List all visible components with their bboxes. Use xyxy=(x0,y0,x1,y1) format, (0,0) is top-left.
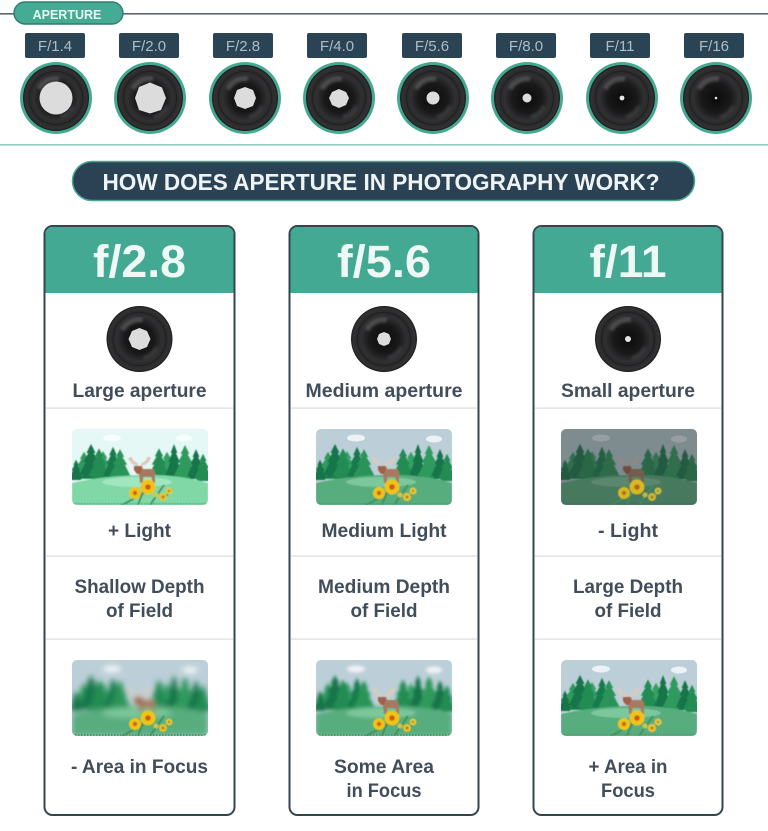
stop f/1.4 xyxy=(20,33,92,134)
label medium depth of field: Medium Depth xyxy=(318,576,450,598)
label some area in focus: in Focus xyxy=(346,780,422,802)
teal rule line xyxy=(0,144,768,146)
stop f/11: F/11 xyxy=(606,38,634,55)
stop f/2.8 xyxy=(209,33,281,134)
stop f/2.8: F/2.8 xyxy=(226,38,260,55)
label more area in focus xyxy=(588,756,668,802)
lens icon small aperture xyxy=(595,306,661,372)
stop f/5.6: F/5.6 xyxy=(415,38,449,55)
label minus light: - Light xyxy=(598,520,659,542)
aperture scale row xyxy=(20,33,752,134)
stop f/2.0: F/2.0 xyxy=(132,38,166,55)
label more area in focus: Focus xyxy=(601,780,655,802)
stop f/2.0 xyxy=(114,33,186,134)
scene blurred background xyxy=(69,660,212,736)
label small aperture: Small aperture xyxy=(561,380,695,402)
header f/11: f/11 xyxy=(590,236,666,287)
header f/5.6 xyxy=(290,227,478,293)
scene slightly blurred background xyxy=(313,660,456,736)
label some area in focus: Some Area xyxy=(334,756,434,778)
label more area in focus: + Area in xyxy=(588,756,668,778)
label shallow depth of field: of Field xyxy=(106,600,173,622)
label medium depth of field xyxy=(318,576,450,622)
stop f/8.0 xyxy=(491,33,563,134)
stop f/11 xyxy=(586,33,658,134)
label large depth of field: Large Depth xyxy=(573,576,683,598)
stop f/4.0 xyxy=(303,33,375,134)
label shallow depth of field: Shallow Depth xyxy=(74,576,204,598)
scene low light xyxy=(558,429,701,505)
lens icon medium aperture xyxy=(351,306,417,372)
label medium aperture: Medium aperture xyxy=(306,380,463,402)
label medium depth of field: of Field xyxy=(350,600,418,622)
aperture tag xyxy=(14,2,123,24)
lens icon large aperture xyxy=(106,306,172,372)
stop f/16 xyxy=(680,33,752,134)
label shallow depth of field xyxy=(74,576,204,622)
scene medium light xyxy=(313,429,456,505)
label plus light: + Light xyxy=(108,520,171,542)
top rule line xyxy=(0,13,768,15)
title banner xyxy=(72,162,694,200)
header f/2.8 xyxy=(46,227,234,293)
aperture tag: APERTURE xyxy=(33,8,101,22)
scene all in focus xyxy=(558,660,701,736)
stop f/1.4: F/1.4 xyxy=(38,38,72,55)
panel: f/2.8 xyxy=(44,226,234,815)
label large depth of field: of Field xyxy=(594,600,662,622)
title banner: HOW DOES APERTURE IN PHOTOGRAPHY WORK? xyxy=(102,169,660,195)
scene bright light xyxy=(69,429,212,505)
stop f/5.6 xyxy=(397,33,469,134)
stop f/8.0: F/8.0 xyxy=(509,38,543,55)
header f/11 xyxy=(534,227,722,293)
header f/5.6: f/5.6 xyxy=(337,236,431,287)
panel: f/11 xyxy=(534,226,722,815)
label less area in focus: - Area in Focus xyxy=(71,756,208,778)
stop f/16: F/16 xyxy=(699,38,729,55)
stop f/4.0: F/4.0 xyxy=(320,38,354,55)
label medium light: Medium Light xyxy=(322,520,447,542)
panel: f/5.6 xyxy=(290,226,478,815)
header f/2.8: f/2.8 xyxy=(93,236,186,287)
label large aperture: Large aperture xyxy=(72,380,207,402)
label some area in focus xyxy=(334,756,434,802)
label large depth of field xyxy=(573,576,683,622)
